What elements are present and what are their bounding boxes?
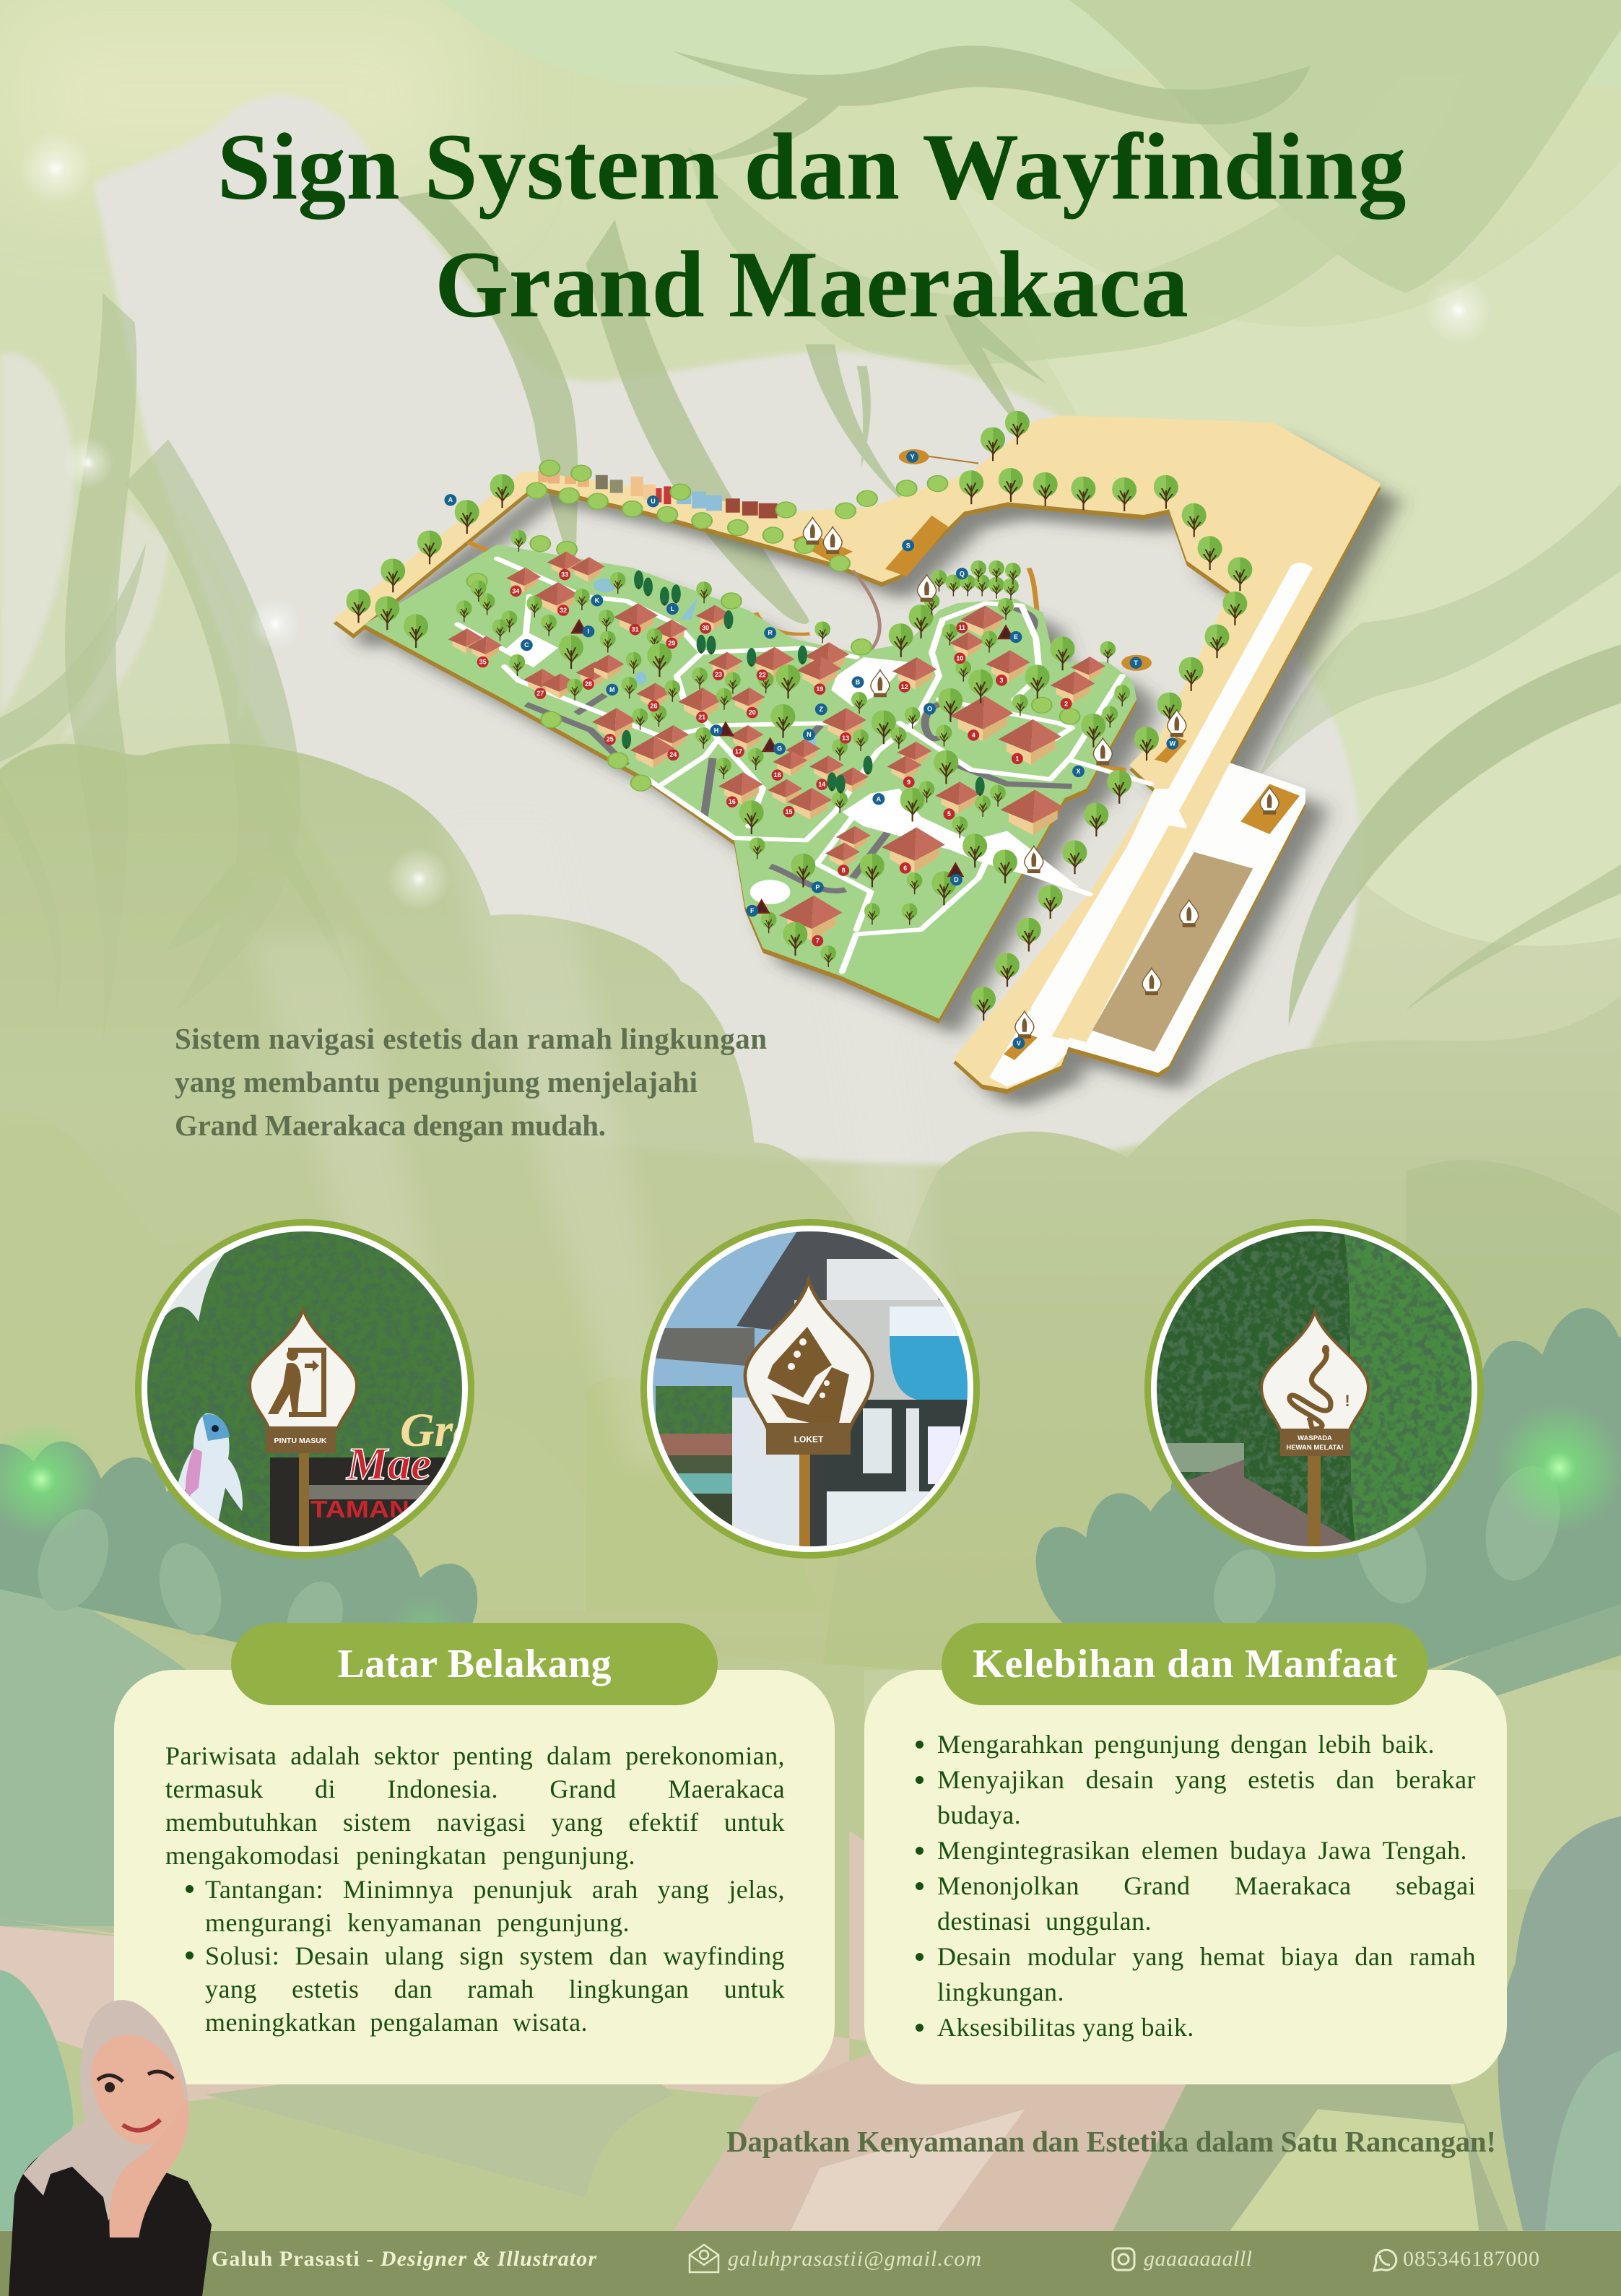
footer bar [0,2231,1621,2296]
top colour fields [0,0,469,191]
map red house numbers: 31 [632,626,639,633]
text block: latar belakang: Tantangan: Minimnya penunjuk arah yang jelas, [205,1875,785,1904]
map blue letters: D [954,876,959,883]
site map [334,411,1381,1093]
map red house numbers: 1 [1015,755,1019,762]
icon: person entering door [268,1348,326,1417]
photo circle: pintu masuk sign: Mae [346,1438,431,1489]
text block: latar belakang: mengurangi kenyamanan pengunjung. [205,1908,630,1937]
map blue letters: Y [911,453,915,460]
photo circle: pintu masuk sign: PINTU MASUK [274,1437,327,1445]
map red house numbers: 23 [715,671,722,678]
map red house numbers: 26 [650,703,657,710]
map trees [347,411,1252,1021]
map red house numbers: 12 [901,683,908,690]
map red house numbers: 11 [959,624,965,631]
map red house numbers: 7 [816,937,820,945]
icon: snake [1290,1351,1331,1429]
text block: latar belakang: meningkatkan pengalaman wisata. [205,2008,588,2037]
hanging roots [0,46,1621,1171]
map red house numbers: 28 [585,680,592,688]
grey clearing [94,95,1360,1164]
map red house numbers: 17 [735,748,742,755]
map blue letters: F [750,907,755,914]
map blue letters: A [877,795,882,802]
map blue letters: U [651,498,656,505]
heading pill: kelebihan dan manfaat: Kelebihan dan Manfaat [973,1642,1397,1686]
bushes [0,1304,1621,1671]
icon: email [690,2245,718,2272]
text block: kelebihan dan manfaat: Mengintegrasikan elemen budaya Jawa Tengah. [937,1836,1467,1865]
map blue letters: Z [820,706,824,713]
text block: latar belakang: termasuk di Indonesia. Grand Maerakaca [165,1775,785,1803]
map blue letters: V [1017,1039,1021,1047]
photo circle: pintu masuk sign: TAMAN M [310,1496,440,1522]
walkway buildings [538,471,778,519]
map red house numbers: 2 [1064,700,1068,707]
map red house numbers: 29 [668,640,675,646]
map blue letters: T [1134,659,1138,667]
map blue letters [444,451,1178,1049]
pink path [0,1831,1318,2231]
map blue letters: L [671,605,675,612]
map blue letters: O [927,706,932,712]
black top [9,2147,212,2296]
call to action: Dapatkan Kenyamanan dan Estetika dalam Satu Rancangan! [726,2125,1496,2158]
map red house numbers: 16 [729,798,736,805]
face [91,2035,185,2144]
map red house numbers: 24 [669,751,677,758]
map red house numbers: 35 [479,659,487,665]
map red house numbers: 30 [702,625,709,632]
text block: latar belakang: mengakomodasi peningkatan pengunjung. [165,1841,635,1870]
walkway bushes [467,460,1079,791]
map blue letters: S [906,542,911,549]
map blue letters: W [1170,740,1176,748]
map red house numbers: 25 [607,736,614,743]
text block: kelebihan dan manfaat: Menyajikan desain yang estetis dan berakar [937,1765,1476,1794]
map red house numbers: 4 [972,732,975,739]
map blue letters: H [714,727,718,734]
hand [109,2098,189,2239]
icon: tickets [768,1327,849,1430]
text block: kelebihan dan manfaat: Mengarahkan pengunjung dengan lebih baik. [937,1730,1435,1759]
map blue letters: M [609,686,614,693]
icon: instagram [1113,2248,1134,2270]
white road and parking [989,563,1313,1087]
translucent clouds [0,744,937,1611]
map red house numbers: 5 [947,810,951,818]
map red house numbers: 27 [536,690,544,697]
map red house numbers: 15 [786,808,793,815]
map blue letters: A [448,496,453,503]
map blue letters: N [807,731,812,738]
text block: latar belakang: Solusi: Desain ulang sign system dan wayfinding [205,1941,785,1970]
hijab [23,2000,189,2221]
intro subtitle: Sistem navigasi estetis dan ramah lingkungan [175,1022,767,1055]
map red house numbers: 32 [560,607,567,614]
text block: kelebihan dan manfaat: Aksesibilitas yang baik. [937,2013,1194,2042]
map land base [334,420,1381,1093]
heading pill: kelebihan dan manfaat [942,1623,1428,1705]
text block: kelebihan dan manfaat: Desain modular yang hemat biaya dan ramah [937,1942,1476,1971]
map red house numbers: 18 [774,771,781,779]
intro subtitle: yang membantu pengunjung menjelajahi [175,1065,697,1099]
garden island [364,545,1137,1018]
glows [0,130,1621,1671]
paths [458,559,1151,972]
text block: kelebihan dan manfaat: destinasi unggulan. [937,1907,1152,1936]
text block: latar belakang: yang estetis dan ramah lingkungan untuk [205,1975,785,2003]
sand promenade [334,415,1381,1089]
photo circle: pintu masuk sign: Gra [400,1404,477,1457]
heading pill: latar belakang [231,1623,718,1705]
footer bar: gaaaaaaalll [1144,2247,1252,2271]
text block: kelebihan dan manfaat: budaya. [937,1801,1021,1829]
footer bar: galuhprasastii@gmail.com [728,2247,981,2271]
text block: kelebihan dan manfaat: Menonjolkan Grand Maerakaca sebagai [937,1871,1476,1900]
map red house numbers: 14 [818,781,825,788]
mascot [178,1413,243,1521]
map blue letters: Q [960,570,965,577]
map red house numbers: 34 [512,587,519,594]
text block: kelebihan dan manfaat [916,1730,1476,2042]
title: Sign System dan Wayfinding [217,113,1407,220]
title: Grand Maerakaca [435,231,1188,337]
map sign markers [803,517,1279,1039]
map blue letters: C [524,641,529,649]
map blue letters: R [768,629,773,636]
photo circle: waspada sign [1144,1219,1484,1559]
ground [0,1538,1621,2296]
footer bar: Galuh Prasasti - Designer & Illustrator [212,2247,596,2271]
map red house numbers: 3 [1000,677,1004,684]
photo circle: waspada sign: WASPADA [1298,1434,1332,1442]
designer portrait [9,2000,212,2296]
panel: latar belakang card [114,1670,835,2084]
photo circle: loket sign [640,1219,980,1559]
map blue letters: G [777,745,782,753]
map red house numbers [477,569,1072,946]
map blue letters: P [815,884,820,891]
text block: latar belakang: membutuhkan sistem navigasi yang efektif untuk [165,1808,785,1837]
map blue letters: B [856,678,861,685]
panel: kelebihan dan manfaat card [864,1670,1507,2084]
sign board [250,1309,357,1428]
photo circle: loket sign: LOKET [794,1434,824,1444]
heading pill: latar belakang: Latar Belakang [338,1642,611,1686]
map red house numbers: 19 [816,685,823,693]
text block: latar belakang [165,1741,785,2037]
map blue letters: I [588,628,589,635]
text block: latar belakang: Pariwisata adalah sektor penting dalam perekonomian, [165,1741,785,1770]
map red house numbers: 6 [903,865,907,872]
map blue letters: E [1014,633,1018,641]
map red house numbers: 8 [842,867,846,874]
map blue letters: K [595,597,600,604]
icon: whatsapp [1374,2250,1396,2271]
map red house numbers: 13 [842,735,849,742]
intro subtitle: Grand Maerakaca dengan mudah. [175,1109,606,1142]
houses [448,551,1105,941]
sign board [1261,1312,1368,1430]
text block: kelebihan dan manfaat: lingkungan. [937,1977,1064,2006]
map red house numbers: 22 [759,672,766,679]
map red house numbers: 33 [561,571,568,579]
footer bar: 085346187000 [1403,2247,1539,2271]
map blue letters: X [1077,768,1081,775]
map red house numbers: 9 [907,779,911,786]
tan parking [1092,852,1253,1052]
photo circle: waspada sign: ! [1344,1392,1350,1410]
sign board [745,1281,872,1429]
map red house numbers: 21 [698,714,705,721]
rivers [526,608,1072,891]
photo circle: pintu masuk sign [135,1219,477,1559]
map red house numbers: 10 [956,654,963,662]
map red house numbers: 20 [749,709,756,716]
photo circle: waspada sign: HEWAN MELATA! [1286,1444,1344,1452]
